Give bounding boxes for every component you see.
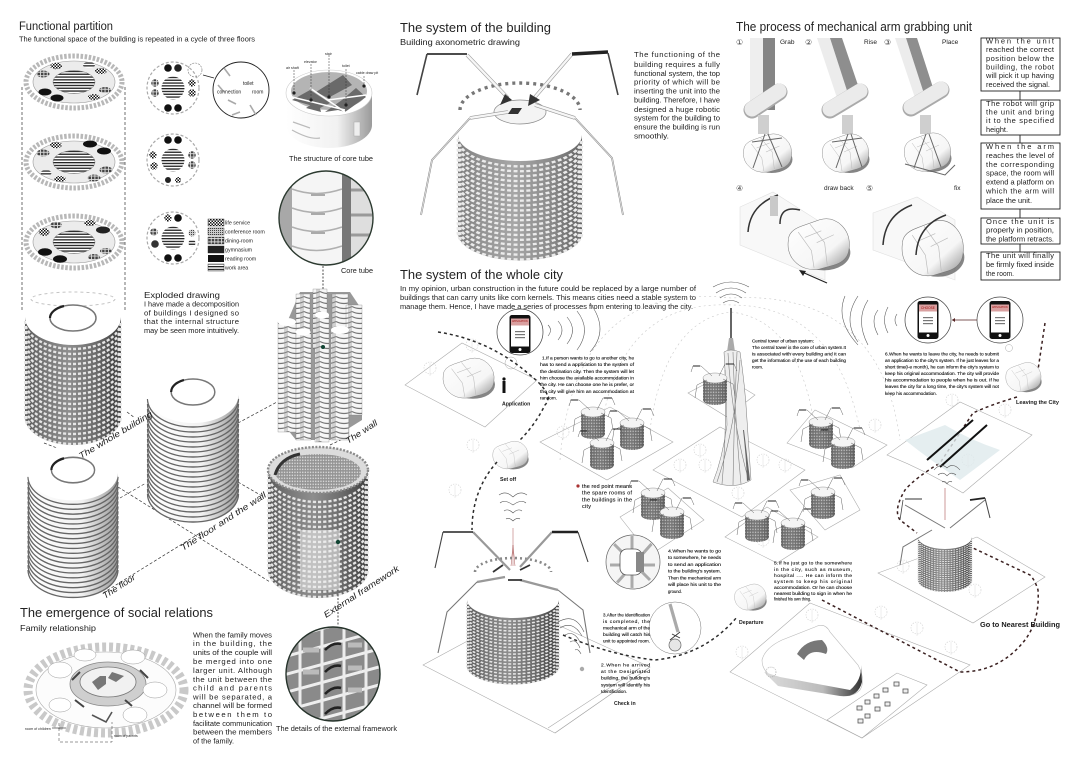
step 6 text: keep his original accommodation. The city will provide [885, 371, 999, 377]
heading: the system of the building: Building axonometric drawing [400, 38, 520, 47]
process step boxes [981, 36, 1060, 280]
family relationship paragraph [192, 630, 273, 746]
central urban tower [713, 308, 751, 486]
building system paragraph [634, 50, 720, 140]
plan disc 1 [26, 56, 122, 108]
building system paragraph: designed a huge robotic [634, 105, 720, 114]
dashed alignment lines for exploded drawing [22, 87, 347, 626]
step 1 grab: ① [736, 38, 743, 47]
red point note [576, 484, 632, 510]
step 3 text: building will catch his [603, 632, 651, 638]
step 6 text [885, 352, 1000, 397]
rotated italic labels for exploded parts: The wall [344, 417, 380, 446]
heading: mechanical arm process: The process of mechanical arm grabbing unit [736, 20, 972, 34]
step 4 text: 4.When he wants to go [668, 548, 721, 554]
legend: room types: work area [225, 266, 248, 272]
exploded drawing text [144, 290, 239, 335]
box 1: will pick it up having [985, 71, 1054, 80]
exploded drawing text: of buildings I designed so [144, 308, 239, 318]
stadium building [762, 625, 863, 696]
family relationship paragraph: When the family moves [193, 630, 272, 640]
step 5 text: finished his own thing. [774, 596, 811, 602]
exploded: the wall columns [278, 289, 362, 442]
family relationship perspective disc [25, 647, 184, 742]
step 1 text: 1.If a person wants to go to another city, he [542, 356, 634, 362]
small city buildings with arms [569, 364, 865, 550]
step 6 text: short time(i-e month), he can inform the city's system to [885, 364, 999, 370]
step 4 text: ground. [668, 589, 682, 595]
step 6 text: keep his accommodation. [885, 391, 937, 397]
step 4 draw back: ④ [736, 184, 743, 193]
red point note: the buildings in the [582, 498, 632, 504]
broadcast arcs from central tower [560, 282, 900, 460]
step 4 text: to send an application [668, 562, 721, 568]
box 5: be firmly fixed inside [986, 260, 1054, 269]
family relationship paragraph: will be separated, a [192, 692, 273, 702]
family relationship paragraph: the unit between the [193, 675, 272, 684]
core tube structure drawing: stair [325, 52, 333, 56]
legend: room types: conference room [225, 230, 265, 236]
heading: social relations: The emergence of social relations [20, 606, 213, 620]
heading: functional partition [19, 21, 255, 44]
external framework detail circle: The details of the external framework [276, 724, 397, 733]
red point note: city [582, 504, 591, 510]
heading: the system of the whole city [400, 268, 697, 311]
step 1 text: the city will give him an accommodation at [540, 389, 635, 395]
box 2 [981, 99, 1060, 135]
phone choose: CHOOSE [921, 306, 935, 310]
family relationship paragraph: facilitate communication [193, 719, 272, 728]
building system paragraph: ensure the building is run [634, 122, 720, 132]
magnifier: toilet, connection, room: room [252, 90, 263, 96]
box 4: properly in position, [986, 226, 1054, 234]
heading: functional partition: Functional partition [19, 21, 113, 33]
family relationship paragraph: be merged into one [193, 657, 272, 666]
step 3 text: is completed, the [603, 619, 650, 625]
step 5 fix: fix [954, 185, 961, 192]
step 2 text and check in label: at the Designated [601, 669, 650, 675]
core tube structure drawing: toilet [342, 64, 350, 68]
box 4: the platform retracts. [986, 234, 1054, 244]
step 5 text: system to keep his original [774, 579, 852, 585]
step 6 phones: choose and application [842, 296, 1023, 345]
magnifier: toilet, connection, room: connection [217, 90, 241, 96]
rotated italic labels for exploded parts: External framework [322, 563, 402, 620]
step 4 draw back: draw back [824, 185, 854, 192]
central tower text [752, 338, 847, 370]
legend: room types: gymnasium [225, 248, 253, 254]
legend: room types: reading room [225, 256, 257, 262]
box 2: The robot will grip [986, 99, 1054, 108]
step 1 text: the city. He can choose one he is prefer, or [540, 382, 634, 388]
exploded drawing text: may be seen more intuitively. [144, 326, 239, 335]
box 1: position below the [986, 54, 1054, 63]
step 2 text and check in label [601, 662, 651, 707]
building system paragraph: building. Therefore, I have [634, 96, 720, 104]
building system paragraph: functional system, the top [634, 69, 720, 78]
legend: room types: life service [225, 220, 250, 226]
box 4: Once the unit is [986, 217, 1054, 226]
heading: the system of the building [400, 21, 551, 47]
exploded: the floor [28, 446, 118, 598]
exploded drawing text: that the internal structure [144, 317, 239, 326]
box 2: it to the specified [986, 116, 1054, 125]
rotated italic labels for exploded parts [77, 409, 402, 620]
step 3 text: mechanical arm of the [603, 626, 650, 632]
phone application [497, 309, 543, 355]
box 2: height. [986, 125, 1008, 134]
red point note: the red point means [582, 484, 632, 490]
central tower text: is associated with every building and it can [752, 352, 846, 358]
step 4 text: to somewhere, he needs [668, 555, 722, 561]
step 5 fix: ⑤ [866, 184, 873, 193]
core tube detail circle [278, 170, 376, 275]
step 1 text: random. [540, 396, 557, 402]
step 6 text: leaves the city for a long time, the city's system will not [885, 384, 1000, 390]
heading: social relations [20, 606, 213, 633]
building system paragraph: priority of which will be [634, 78, 720, 86]
leaving the city unit: Leaving the City [1016, 400, 1059, 406]
step 3 text: unit to appointed room. [603, 638, 650, 644]
external framework detail circle [276, 626, 397, 731]
family relationship paragraph: in the building, the [193, 639, 272, 648]
step 4 text: will place his unit to the [668, 582, 721, 588]
magnifier: mechanical arm placing unit [606, 535, 660, 590]
step 4 text [668, 548, 722, 595]
box 3: which the arm will [985, 186, 1054, 196]
step 5 text: accommodation. Or he can choose [774, 585, 852, 591]
step 1 text: the destination city. Then the system will let [540, 369, 635, 375]
step 1 grab: Grab [780, 39, 795, 46]
step 5 text: hospital .... He can inform the [774, 573, 852, 579]
legend: room types [208, 219, 265, 272]
central tower text: The central tower is the core of urban system.It [752, 345, 847, 351]
step 2 rise [805, 38, 877, 173]
set off unit [493, 441, 529, 483]
magnifier: toilet, connection, room: toilet [243, 81, 254, 87]
heading: functional partition: The functional space of the building is repeated in a cycle of three floors [19, 34, 255, 44]
family relationship perspective disc: room of parents [114, 734, 138, 738]
step 5 text [774, 560, 852, 602]
box 3: When the arm [986, 142, 1054, 151]
small plan 2 [147, 134, 199, 186]
plan disc 2 [26, 136, 122, 188]
small plan 1 [147, 62, 199, 114]
nearest building with robot arms [900, 498, 1060, 629]
step 3 place: Place [942, 39, 959, 46]
small plan 3 [147, 212, 199, 264]
set off unit: Set off [500, 477, 516, 483]
departure unit [735, 584, 767, 626]
person [502, 377, 506, 393]
box 1: received the signal. [986, 80, 1050, 89]
step 6 text: his accommodation to people when he is out. If he [885, 378, 999, 384]
heading: the system of the whole city: buildings that can carry units like corn kernels. This means cities need a stable system to [400, 293, 696, 302]
step 6 text: an application to the city's system. If he just leaves for a [885, 358, 999, 364]
box 3: space, the room will [986, 168, 1054, 178]
family relationship paragraph: units of the couple will [193, 648, 272, 657]
red point note: the spare rooms of [582, 490, 632, 496]
family relationship paragraph: channel will be formed [193, 701, 272, 710]
step 5 text: nearest building to sign in when he [774, 591, 852, 597]
exploded drawing text: Exploded drawing [144, 290, 220, 300]
exploded: the floor and the wall [148, 367, 238, 523]
route: dashed journey lines [438, 323, 1045, 672]
phone choose [905, 297, 951, 343]
box 3: the corresponding [986, 160, 1054, 169]
magnifier: toilet, connection, room [188, 62, 269, 118]
step 2 text and check in label: Check in [614, 701, 636, 707]
central tower text: get the information of the use of each building [752, 358, 846, 364]
departure unit: Departure [739, 620, 764, 626]
central tower text: Central tower of urban system: [752, 338, 814, 344]
box 3 [981, 142, 1060, 209]
box 1 [981, 36, 1060, 91]
box 3: reaches the level of [986, 151, 1055, 160]
nearest building with robot arms: Go to Nearest Building [980, 620, 1060, 629]
step 4 text: Then the mechanical arm [668, 576, 721, 582]
family relationship perspective disc: room of children [25, 727, 51, 731]
step 5 fix [866, 184, 964, 280]
detection waves next to designated building [558, 619, 584, 671]
step 1: application scene [443, 303, 600, 408]
step 6 text: 6.When he wants to leave the city, he needs to submit [885, 352, 1000, 358]
building system paragraph: inserting the unit into the [634, 86, 720, 96]
step 1 text: him choose the available accommodation in [540, 376, 634, 382]
box 5: the room. [986, 269, 1014, 278]
family relationship paragraph: between the members [193, 728, 272, 736]
parking grid of small units [857, 682, 908, 723]
heading: social relations: Family relationship [20, 624, 96, 633]
step 4 draw back [736, 184, 854, 283]
box 1: reached the correct [986, 45, 1055, 54]
legend: room types: dining-room [225, 238, 254, 244]
step 2 rise: Rise [864, 39, 877, 46]
rotated italic labels for exploded parts: The whole building [77, 409, 154, 461]
designated building with robot arms [435, 493, 590, 684]
step 2 text and check in label: Identification. [601, 689, 627, 695]
family relationship paragraph: between them to [193, 710, 272, 719]
exploded: external framework [268, 447, 368, 598]
plan disc 3 [26, 216, 122, 268]
core tube structure drawing: cable draw pit [356, 71, 378, 75]
isometric ground planes [405, 343, 1045, 738]
building axonometric drawing with robot arms [417, 52, 623, 260]
floor plans: three perspective plan discs [26, 56, 122, 268]
rotated italic labels for exploded parts: The floor and the wall [179, 489, 269, 553]
core tube detail circle: Core tube [341, 266, 373, 275]
magnifier: arm catching the unit [649, 602, 701, 654]
road bridge scene [905, 420, 1000, 520]
box 1: building, the robot [986, 62, 1055, 72]
box 1: When the unit [986, 36, 1055, 46]
box 5 [981, 251, 1060, 280]
core tube structure drawing: The structure of core tube [289, 154, 373, 163]
family relationship paragraph: child and parents [193, 684, 272, 692]
leaving the city unit [1006, 344, 1059, 406]
step 2 rise: ② [805, 38, 812, 47]
heading: the system of the whole city: The system of the whole city [400, 268, 564, 282]
exploded: the whole building [25, 289, 121, 445]
step 3 text [603, 612, 651, 644]
core tube structure drawing: air shaft [286, 66, 299, 70]
core tube structure drawing [286, 52, 378, 163]
step 4 text: to the building's system. [668, 568, 721, 574]
trees scattered on planes [424, 339, 1011, 678]
box 2: the unit and bring [986, 108, 1054, 116]
step 3 place: ③ [884, 38, 891, 47]
step 3 place [884, 38, 959, 175]
step 1 text [540, 356, 635, 402]
small plan diagrams with coloured room patterns [147, 62, 199, 264]
core tube structure drawing: elevator [304, 60, 318, 64]
step 1 text: has to send a application to the system of [540, 362, 635, 368]
family relationship paragraph: of the family. [193, 736, 234, 746]
step 2 text and check in label: 2.When he arrived [601, 662, 650, 668]
step 3 text: 3.After the identification [603, 612, 650, 618]
central tower text: room. [752, 364, 763, 370]
box 4 [981, 217, 1060, 244]
rotated italic labels for exploded parts: The floor [101, 571, 138, 601]
phone leave: APPLICATION [992, 306, 1008, 309]
phone application: APPLICATION [512, 320, 528, 323]
building system paragraph: smoothly. [634, 132, 669, 140]
family relationship paragraph: larger unit. Although [193, 666, 272, 675]
box 3: place the unit. [986, 196, 1032, 205]
step 5 text: in the city, such as museum, [774, 567, 852, 573]
building system paragraph: system for the building to [634, 114, 720, 122]
exploded drawing text: I have made a decomposition [144, 300, 239, 308]
step 5 text: 5.If he just go to the somewhere [774, 560, 852, 566]
step 1 grab [736, 38, 795, 173]
building system paragraph: The functioning of the [634, 50, 720, 59]
heading: the system of the whole city: In my opinion, urban construction in the future could be replaced by a large number of [400, 284, 697, 293]
heading: the system of the whole city: manage them. Hence, I have made a series of processes from entering to leaving the city. [400, 302, 693, 311]
step 1: application scene: Application [502, 402, 530, 408]
heading: the system of the building: The system of the building [400, 21, 551, 35]
phone leave [977, 297, 1023, 343]
building system paragraph: building requires a fully [634, 60, 720, 69]
box 5: The unit will finally [986, 251, 1054, 260]
box 3: extend a platform on [986, 178, 1054, 186]
step 2 text and check in label: system will identify his [601, 682, 651, 688]
step 2 text and check in label: building, the building's [601, 676, 651, 682]
